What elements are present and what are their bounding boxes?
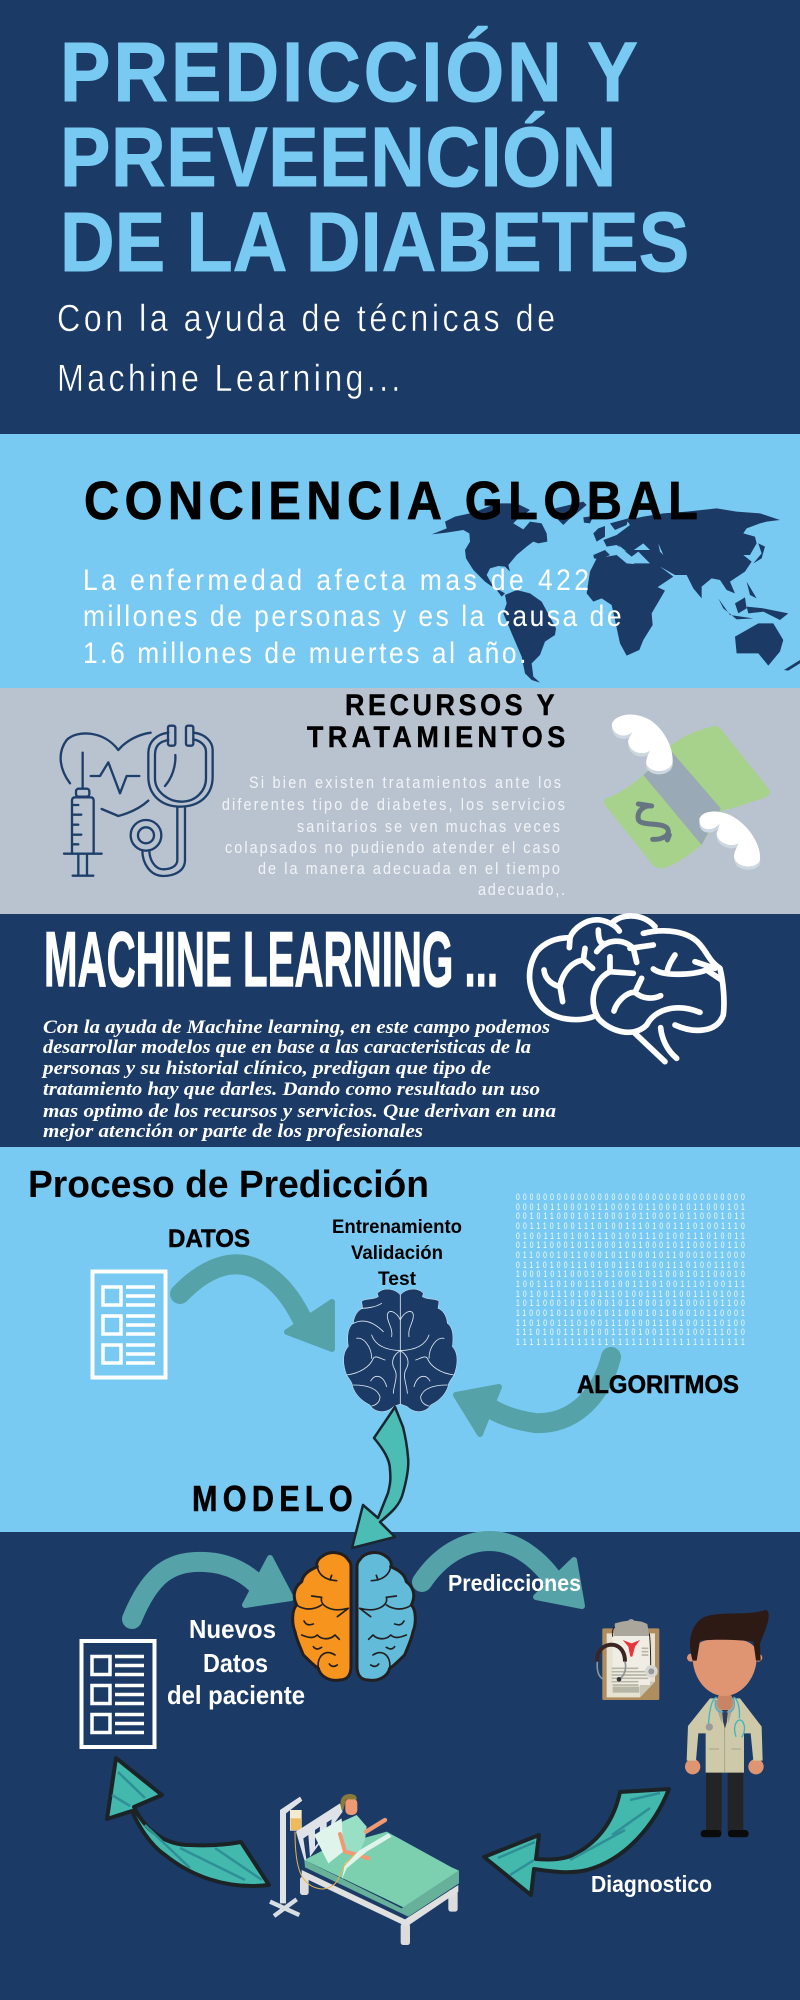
label: entrenamiento, validación, test: Test — [378, 1269, 417, 1290]
text: machine learning paragraph: mejor atención or parte de los profesionales — [43, 1121, 423, 1142]
label: entrenamiento, validación, test: Validación — [351, 1243, 443, 1264]
heading: conciencia global: CONCIENCIA GLOBAL — [84, 470, 698, 531]
icon: binary code block: 1001110100111010011101001110100111 — [516, 1279, 745, 1289]
icon: heart, syringe and stethoscope — [61, 726, 213, 876]
panel: proceso de predicción — [0, 1147, 800, 1532]
subtitle: Machine Learning... — [57, 358, 400, 400]
icon: world map — [432, 502, 800, 683]
label: nuevos datos del paciente: Nuevos — [189, 1614, 276, 1644]
text: global statistics: La enfermedad afecta mas de 422 — [83, 562, 589, 596]
icon: binary code block — [516, 1192, 745, 1347]
heading: recursos y tratamientos — [307, 689, 565, 754]
icon: clipboard with stethoscope — [597, 1619, 659, 1700]
text: machine learning paragraph: mas optimo de los recursos y servicios. Que derivan en una — [43, 1101, 557, 1122]
text: machine learning paragraph: tratamiento hay que darles. Dando como resultado un uso — [43, 1079, 540, 1100]
heading: recursos y tratamientos: RECURSOS Y — [345, 689, 555, 722]
arrow: brain to predicciones — [422, 1541, 582, 1606]
label: nuevos datos del paciente: Datos — [203, 1648, 268, 1678]
subtitle: Con la ayuda de técnicas de — [57, 298, 555, 340]
icon: white outline brain — [530, 916, 724, 1062]
label: algoritmos: ALGORITMOS — [577, 1371, 739, 1399]
arrow: algoritmos to brain — [456, 1357, 611, 1434]
icon: navy brain — [344, 1289, 457, 1412]
icon: doctor — [685, 1610, 769, 1837]
icon: binary code block: 1000101100010110001011000101100010 — [516, 1269, 745, 1279]
text: global statistics — [83, 562, 622, 669]
label: modelo: MODELO — [192, 1480, 353, 1520]
text: recursos paragraph: colapsados no pudiendo atender el caso — [225, 839, 560, 857]
icon: binary code block: 1110100111010011101001110100111010 — [516, 1327, 745, 1337]
icon: orange and blue brain — [293, 1553, 415, 1680]
icon: patient in hospital bed — [270, 1794, 459, 1945]
text: machine learning paragraph: personas y su historial clínico, predigan que tipo de — [41, 1058, 492, 1079]
icon: binary code block: 0100111010011101001110100111010011 — [516, 1231, 745, 1241]
label: entrenamiento, validación, test: Entrenamiento — [332, 1217, 462, 1238]
text: machine learning paragraph: desarrollar modelos que en base a las caracteristicas de la — [43, 1037, 532, 1058]
text: recursos paragraph: sanitarios se ven muchas veces — [297, 818, 560, 836]
icon: flying money — [604, 715, 770, 870]
text: recursos paragraph: de la manera adecuada en el tiempo — [258, 860, 560, 878]
label: predicciones: Predicciones — [448, 1570, 581, 1596]
subtitle — [57, 298, 555, 400]
main title: PREVEENCIÓN — [60, 110, 616, 204]
icon: binary code block: 1010011101001110100111010011101001 — [516, 1289, 745, 1299]
text: global statistics: 1.6 millones de muertes al año. — [83, 635, 527, 669]
icon: data document — [92, 1272, 166, 1378]
main title — [60, 25, 689, 289]
text: recursos paragraph — [222, 774, 565, 899]
icon: binary code block: 0111010011101001110100111010011101 — [516, 1260, 745, 1270]
icon: patient document — [82, 1641, 154, 1747]
label: entrenamiento, validación, test — [332, 1217, 462, 1290]
text: recursos paragraph: adecuado,. — [478, 881, 565, 899]
panel: nuevos datos cycle — [0, 1532, 800, 2000]
label: datos: DATOS — [168, 1225, 250, 1253]
icon: binary code block: 0110001011000101100010110001011000 — [516, 1250, 745, 1260]
icon: binary code block: 0000000000000000000000000000000000 — [516, 1192, 745, 1202]
text: global statistics: millones de personas y es la causa de — [83, 598, 622, 632]
icon: binary code block: 1101001110100111010011101001110100 — [516, 1318, 745, 1328]
icon: binary code block: 1111111111111111111111111111111111 — [516, 1337, 745, 1347]
panel: title header — [0, 0, 800, 434]
panel: conciencia global — [0, 434, 800, 688]
heading: recursos y tratamientos: TRATAMIENTOS — [307, 721, 565, 754]
label: diagnostico: Diagnostico — [591, 1871, 712, 1897]
text: recursos paragraph: diferentes tipo de diabetes, los servicios — [222, 796, 565, 814]
arrow: central brain to model brain — [352, 1407, 408, 1548]
arrow: nuevos datos to brain — [132, 1558, 291, 1619]
panel: machine learning — [0, 914, 800, 1147]
arrow: doctor to patient — [484, 1789, 669, 1895]
icon: binary code block: 1011000101100010110001011000101100 — [516, 1298, 745, 1308]
label: nuevos datos del paciente: del paciente — [167, 1680, 305, 1710]
icon: binary code block: 1100010110001011000101100010110001 — [516, 1308, 745, 1318]
text: machine learning paragraph: Con la ayuda de Machine learning, en este campo podemos — [43, 1017, 550, 1038]
icon: binary code block: 0101100010110001011000101100010110 — [516, 1240, 745, 1250]
icon: binary code block: 0011101001110100111010011101001110 — [516, 1221, 745, 1231]
heading: proceso de predicción: Proceso de Predicción — [28, 1164, 429, 1206]
text: recursos paragraph: Si bien existen tratamientos ante los — [249, 774, 561, 792]
main title: PREDICCIÓN Y — [60, 25, 638, 119]
main title: DE LA DIABETES — [60, 195, 689, 289]
arrow: patient to document — [107, 1758, 269, 1886]
arrow: datos to brain — [180, 1264, 332, 1349]
panel: recursos y tratamientos — [0, 688, 800, 914]
icon: binary code block: 0010110001011000101100010110001011 — [516, 1211, 745, 1221]
text: machine learning paragraph — [41, 1017, 557, 1142]
label: nuevos datos del paciente — [167, 1614, 305, 1710]
icon: binary code block: 0001011000101100010110001011000101 — [516, 1202, 745, 1212]
